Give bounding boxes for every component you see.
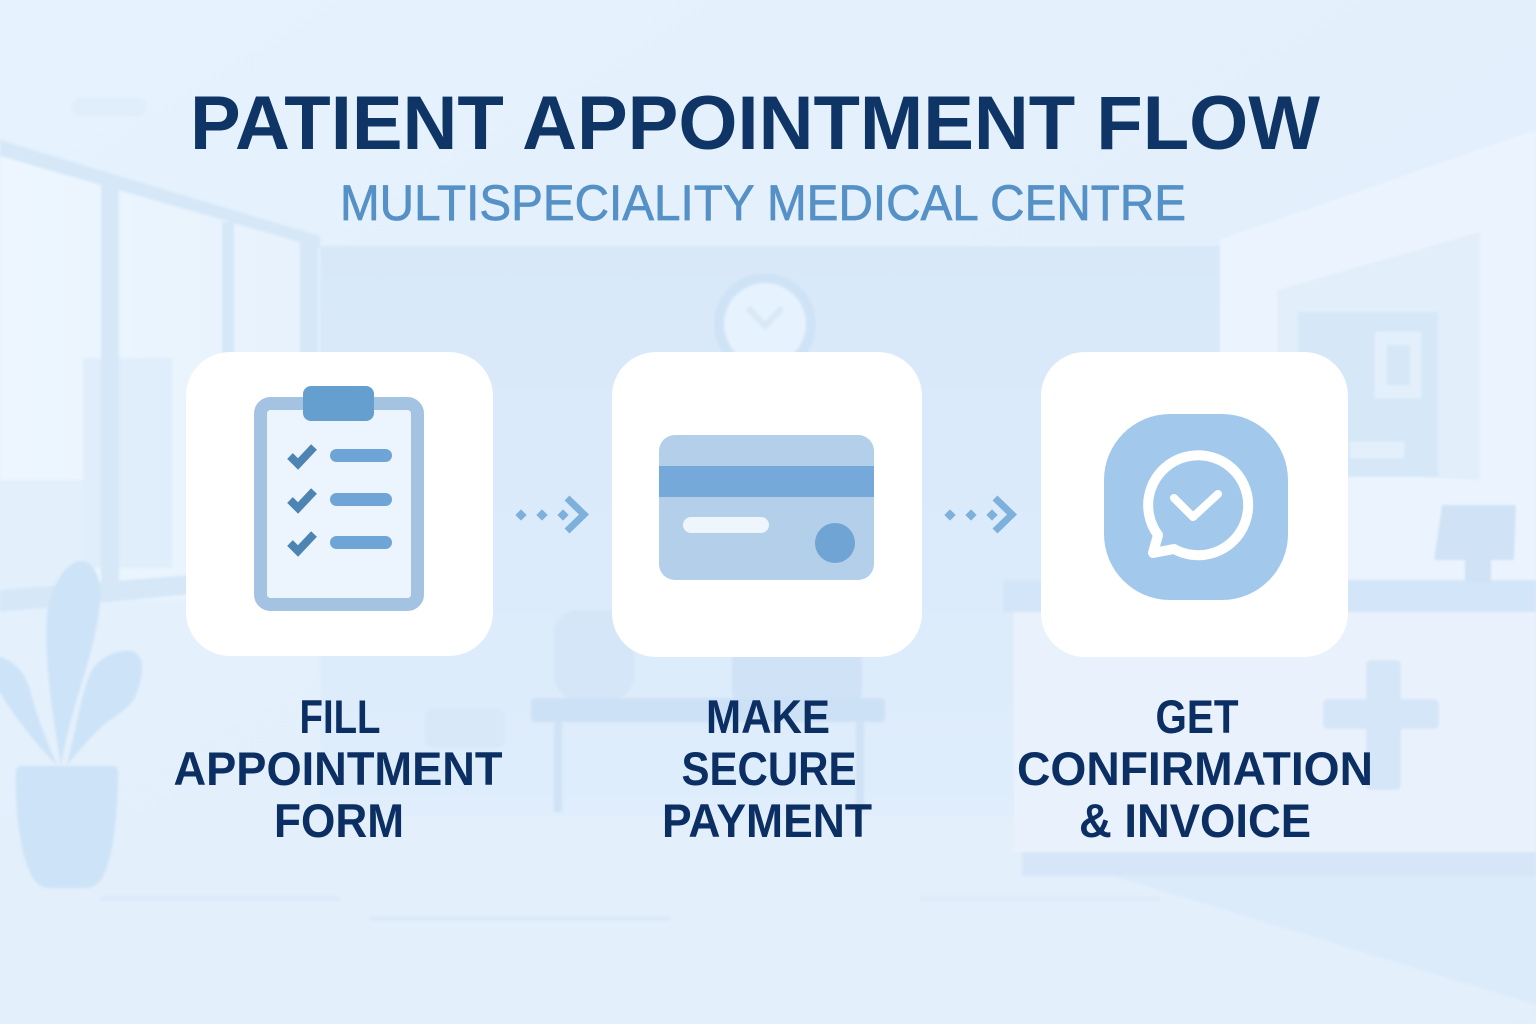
desk [1003, 580, 1536, 612]
step 3 label: & INVOICE [1079, 794, 1311, 847]
step 1 label: APPOINTMENT [174, 742, 503, 795]
icon: chat confirmation badge [1104, 414, 1288, 600]
subtitle: MULTISPECIALITY MEDICAL CENTRE [340, 175, 1186, 231]
step 1 label: FORM [274, 794, 404, 847]
arrow 1 [515, 498, 584, 531]
step 3 label [1017, 690, 1373, 847]
step 1 card: fill appointment form [186, 352, 493, 656]
step 3 label: CONFIRMATION [1017, 742, 1373, 795]
seating [554, 610, 634, 700]
step 2 label: SECURE [682, 742, 856, 795]
step 2 card: make secure payment [612, 352, 922, 657]
title: PATIENT APPOINTMENT FLOW [190, 81, 1320, 166]
step 2 label: MAKE [706, 690, 830, 743]
cross [1366, 660, 1401, 790]
step 2 label: PAYMENT [662, 794, 872, 847]
step 1 label [174, 690, 503, 847]
arrow 2 [944, 498, 1012, 531]
icon: credit card [659, 435, 874, 580]
step 2 label [662, 690, 872, 847]
wall clock [719, 278, 811, 370]
plant [0, 561, 142, 888]
step 3 card: get confirmation and invoice [1041, 352, 1348, 657]
step 3 label: GET [1156, 690, 1239, 743]
step 1 label: FILL [300, 690, 380, 743]
icon: clipboard checklist [260, 386, 418, 604]
